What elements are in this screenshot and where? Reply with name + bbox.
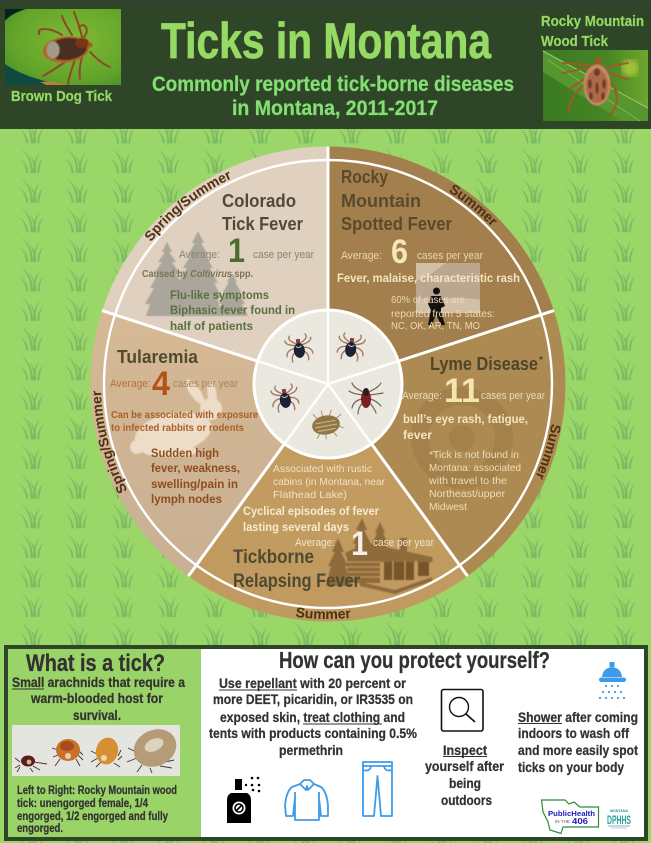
- caption: tick: unengorged female, 1/4: [17, 796, 148, 810]
- illustration: hiker photo: [416, 263, 480, 325]
- footnote: Midwest: [429, 501, 467, 513]
- shower advice: ticks on your body: [518, 759, 624, 775]
- average cases: Average:: [110, 378, 151, 390]
- exposure note: to infected rabbits or rodents: [111, 422, 244, 434]
- heading: Rocky: [341, 167, 388, 187]
- header band: [0, 0, 651, 129]
- symptoms: half of patients: [170, 319, 253, 333]
- label: brown dog tick: Brown Dog Tick: [11, 88, 113, 105]
- inspect advice: [425, 742, 504, 808]
- association note: [273, 463, 385, 501]
- average cases: [341, 233, 483, 271]
- icon: repellant spray: [227, 777, 260, 823]
- repellant advice: more DEET, picaridin, or IR3535 on: [213, 691, 413, 707]
- average cases: cases per year: [481, 390, 545, 402]
- symptoms: Biphasic fever found in: [170, 303, 295, 317]
- average cases: [179, 232, 314, 270]
- average cases: [295, 525, 434, 563]
- heading: Mountain: [341, 191, 421, 211]
- label: rocky mountain wood tick: [541, 13, 644, 50]
- panel: how can you protect yourself: [201, 647, 644, 837]
- subtitle: in Montana, 2011-2017: [232, 97, 438, 120]
- average cases: Average:: [295, 537, 335, 549]
- association note: Associated with rustic: [273, 463, 372, 475]
- symptoms: [170, 288, 295, 333]
- symptoms: Flu-like symptoms: [170, 288, 269, 302]
- inspect advice: outdoors: [441, 792, 492, 808]
- illustration: pine trees: [145, 231, 248, 316]
- panel: lyme disease: [402, 354, 545, 513]
- heading: Tickborne: [233, 547, 314, 568]
- average cases: [402, 372, 545, 410]
- center hub: [254, 310, 402, 458]
- definition: Small arachnids that require a: [12, 674, 185, 690]
- average cases: cases per year: [417, 250, 483, 262]
- ring label: colorado season: Spring/Summer: [145, 172, 230, 241]
- repellant advice: permethrin: [279, 742, 343, 758]
- heading: Relapsing Fever: [233, 571, 361, 592]
- average cases: 4: [152, 365, 170, 403]
- average cases: [110, 365, 238, 403]
- tick icon: colorado: [284, 333, 314, 363]
- average cases: cases per year: [173, 378, 238, 390]
- wheel segment: tickborne relapsing fever: [188, 384, 468, 621]
- label: rocky mountain wood tick: Wood Tick: [541, 33, 609, 50]
- icon: long sleeve shirt: [285, 780, 328, 820]
- heading: [341, 167, 452, 234]
- heading: *: [539, 355, 543, 366]
- heading: Spotted Fever: [341, 214, 452, 234]
- icon: magnifying glass: [442, 690, 483, 731]
- logo: public health in the 406: IN THE: [555, 819, 570, 824]
- heading: What is a tick?: [26, 650, 165, 677]
- distribution note: NC, OK, AR, TN, MO: [391, 320, 480, 332]
- ring label: tularemia season: Spring/Summer: [94, 390, 126, 494]
- repellant advice: Use repellant with 20 percent or: [219, 675, 406, 691]
- distribution note: [391, 294, 495, 332]
- repellant advice: [209, 675, 417, 758]
- symptoms: lasting several days: [243, 520, 349, 534]
- illustration: log cabin: [326, 518, 433, 594]
- logo: montana dphhs: MONTANA: [610, 809, 628, 813]
- title: Ticks in Montana: [161, 13, 492, 69]
- average cases: Average:: [179, 249, 220, 261]
- inspect advice: Inspect: [443, 742, 487, 758]
- heading: Tularemia: [117, 347, 199, 367]
- caption: engorged.: [17, 821, 63, 835]
- photo: tick engorgement stages: [12, 722, 183, 776]
- panel: tularemia: [110, 347, 258, 506]
- average cases: 6: [391, 233, 408, 271]
- heading: How can you protect yourself?: [279, 647, 550, 673]
- panel: tickborne relapsing fever: [233, 463, 434, 592]
- heading: [222, 191, 303, 234]
- ring label: lyme season: Summer: [536, 424, 560, 480]
- caption: Left to Right: Rocky Mountain wood: [17, 783, 177, 797]
- photo: rocky mountain wood tick: [543, 50, 648, 121]
- symptoms: [151, 446, 240, 506]
- symptoms: Cyclical episodes of fever: [243, 504, 379, 518]
- symptoms: Fever, malaise, characteristic rash: [337, 271, 520, 285]
- caption: [17, 783, 177, 835]
- ring label: relapsing season: Summer: [296, 608, 350, 619]
- photo: brown dog tick: [5, 9, 121, 85]
- logo: montana dphhs: DPHHS: [607, 813, 631, 827]
- ring label: rocky season: Summer: [450, 184, 497, 225]
- symptoms: fever, weakness,: [151, 461, 240, 475]
- symptoms: bull’s eye rash, fatigue,: [403, 412, 528, 426]
- footnote: Montana: associated: [429, 462, 521, 474]
- subtitle: [152, 73, 514, 120]
- symptoms: [403, 412, 528, 442]
- panel: colorado tick fever: [142, 191, 314, 333]
- distribution note: 60% of cases are: [391, 294, 465, 306]
- disease wheel: [90, 146, 566, 622]
- illustration: rabbit: [130, 377, 222, 461]
- symptoms: lymph nodes: [151, 492, 222, 506]
- tick icon: soft tick nymph: [310, 407, 345, 441]
- exposure note: Can be associated with exposure: [111, 409, 258, 421]
- wheel segment: tularemia: [90, 311, 328, 576]
- average cases: 1: [228, 232, 245, 270]
- average cases: 11: [444, 372, 480, 410]
- footnote: Northeast/upper: [429, 488, 506, 500]
- definition: [12, 674, 185, 723]
- symptoms: swelling/pain in: [151, 477, 238, 491]
- heading: [233, 547, 361, 592]
- definition: warm-blooded host for: [30, 690, 163, 706]
- definition: survival.: [73, 707, 121, 723]
- caption: engorged, 1/2 engorged and fully: [17, 809, 168, 823]
- bottom panel frame: [4, 645, 648, 841]
- footnote: with travel to the: [428, 475, 507, 487]
- logo: public health in the 406: [542, 800, 598, 834]
- icon: pants: [363, 762, 392, 816]
- footnote: *Tick is not found in: [429, 449, 519, 461]
- wheel segment: lyme disease: [328, 311, 566, 576]
- heading: Tick Fever: [222, 214, 303, 234]
- illustration: bull's eye rash: [420, 396, 504, 480]
- symptoms: Sudden high: [151, 446, 219, 460]
- logo: public health in the 406: PublicHealth: [548, 809, 595, 818]
- average cases: Average:: [402, 390, 442, 402]
- heading: Colorado: [222, 191, 296, 211]
- subtitle: Commonly reported tick-borne diseases: [152, 73, 514, 96]
- repellant advice: exposed skin, treat clothing and: [220, 709, 405, 725]
- wheel spokes and ring: [102, 146, 554, 608]
- wheel segment: rocky mountain spotted fever: [328, 146, 554, 384]
- tick icon: rocky: [336, 332, 366, 362]
- footnote: [428, 449, 521, 513]
- inspect advice: yourself after: [425, 758, 504, 774]
- average cases: 1: [351, 525, 368, 563]
- average cases: case per year: [373, 537, 434, 549]
- association note: cabins (in Montana, near: [273, 476, 385, 488]
- exposure note: [111, 409, 258, 434]
- inspect advice: being: [449, 775, 481, 791]
- symptoms: fever: [403, 428, 432, 442]
- logo: montana dphhs: [607, 809, 631, 828]
- icon: shower: [599, 662, 626, 699]
- wheel segment: colorado tick fever: [102, 146, 328, 384]
- heading: Lyme Disease: [430, 354, 538, 374]
- repellant advice: tents with products containing 0.5%: [209, 725, 417, 741]
- tick icon: blacklegged tick: [349, 383, 383, 414]
- cause: Caused by Coltivirus spp.: [142, 268, 253, 280]
- association note: Flathead Lake): [273, 489, 347, 501]
- average cases: Average:: [341, 250, 382, 262]
- shower advice: [518, 709, 638, 775]
- panel: what is a tick: [8, 649, 201, 837]
- panel: rocky mountain spotted fever: [337, 167, 520, 332]
- distribution note: reported from 5 states:: [391, 308, 495, 320]
- average cases: case per year: [253, 249, 314, 261]
- symptoms: [243, 504, 379, 534]
- shower advice: indoors to wash off: [518, 725, 629, 741]
- tick icon: tularemia: [270, 383, 300, 413]
- logo: public health in the 406: 406: [572, 817, 589, 826]
